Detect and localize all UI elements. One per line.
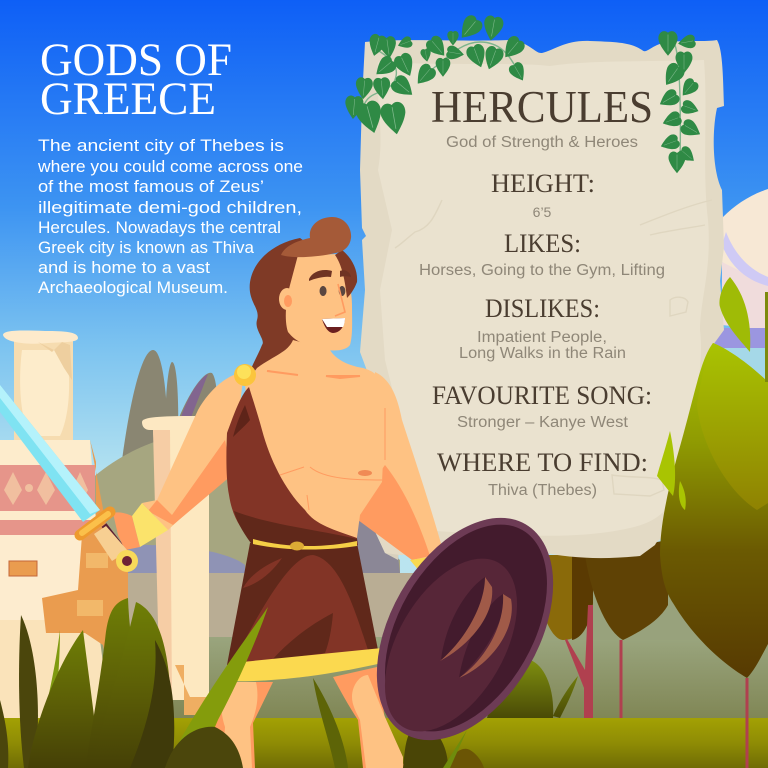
foreground grass centre xyxy=(313,678,484,768)
ruined temple, left xyxy=(0,440,128,718)
face xyxy=(286,254,352,350)
inner ear xyxy=(284,295,292,307)
scroll heading: Hercules: HERCULES xyxy=(431,82,653,132)
intro paragraph: of the most famous of Zeus’ xyxy=(38,178,264,196)
front hair right xyxy=(335,250,357,298)
main title: GREECE xyxy=(40,73,216,125)
pommel xyxy=(116,550,138,572)
intro paragraph: where you could come across one xyxy=(37,158,303,176)
right leg light xyxy=(352,675,403,768)
right arm inner shading xyxy=(358,465,430,560)
left leg xyxy=(215,682,273,768)
collar marks xyxy=(267,371,360,378)
chest lines xyxy=(280,408,385,510)
ground xyxy=(0,718,768,768)
sword grip xyxy=(104,525,128,556)
right arm outer xyxy=(372,372,445,570)
nose xyxy=(335,284,345,316)
foreground grass left xyxy=(0,598,268,768)
shield face centre xyxy=(358,536,544,754)
hand xyxy=(113,512,140,550)
stat: favourite song: FAVOURITE SONG: xyxy=(432,381,652,410)
foreground grass under shield xyxy=(403,728,448,768)
intro paragraph: Archaeological Museum. xyxy=(38,279,228,297)
right background grass xyxy=(487,659,578,718)
mouth xyxy=(322,318,345,333)
intro paragraph: and is home to a vast xyxy=(38,259,210,277)
distant cloud dome xyxy=(708,189,768,388)
eyes xyxy=(320,286,345,296)
stat: where to find: Thiva (Thebes) xyxy=(488,482,597,499)
left arm xyxy=(142,372,244,530)
back hair xyxy=(250,238,330,372)
stat: dislikes: DISLIKES: xyxy=(485,294,600,323)
crossguard highlight xyxy=(82,514,108,533)
background hills and bushes xyxy=(90,350,768,725)
pommel centre xyxy=(122,556,132,566)
stat: favourite song: Stronger – Kanye West xyxy=(457,414,629,431)
fingers xyxy=(94,526,128,561)
left arm inner shading xyxy=(148,440,232,525)
sword blade xyxy=(0,385,100,522)
wrist band xyxy=(410,557,430,572)
parchment weathering xyxy=(395,200,712,496)
main title: GODS OF xyxy=(40,34,232,86)
eyebrows xyxy=(309,270,351,281)
intro paragraph xyxy=(37,137,303,297)
hair swoosh and bun xyxy=(281,217,351,257)
stat: dislikes xyxy=(459,294,626,362)
stat: likes xyxy=(419,229,665,279)
toga lower shadow xyxy=(234,511,357,546)
intro paragraph: The ancient city of Thebes is xyxy=(38,137,284,155)
blade highlight xyxy=(0,385,100,514)
stat: where to find: WHERE TO FIND: xyxy=(437,448,648,477)
stat: dislikes: Impatient People, xyxy=(477,329,607,346)
vines and leaves xyxy=(344,13,704,173)
skirt fold xyxy=(233,555,368,663)
back trees xyxy=(540,540,668,720)
left leg light xyxy=(221,682,257,768)
intro paragraph: Hercules. Nowadays the central xyxy=(38,219,281,237)
stat: likes: Horses, Going to the Gym, Lifting xyxy=(419,262,665,279)
bracer xyxy=(132,503,168,547)
stat: likes: LIKES: xyxy=(504,229,581,258)
parchment scroll panel xyxy=(360,40,724,558)
ruined column, centre xyxy=(142,416,220,715)
skirt highlight xyxy=(243,558,282,588)
ear xyxy=(279,288,295,310)
intro paragraph: illegitimate demi-god children, xyxy=(38,199,302,217)
belt xyxy=(253,539,357,550)
right leg xyxy=(333,667,405,768)
clasp highlight xyxy=(237,365,251,379)
stat: dislikes: Long Walks in the Rain xyxy=(459,345,626,362)
belt buckle xyxy=(290,542,304,550)
ruined column, left xyxy=(3,330,78,445)
shield face dark xyxy=(351,497,581,759)
stat: where to find xyxy=(437,448,648,499)
intro paragraph: Greek city is known as Thiva xyxy=(38,239,255,257)
subtitle: God of Strength & Heroes xyxy=(446,134,638,151)
hem xyxy=(222,648,382,681)
shoulder clasp xyxy=(234,364,256,386)
parchment lighter centre xyxy=(377,60,709,536)
skirt inner shadow xyxy=(272,613,333,660)
stat: favourite song xyxy=(432,381,652,431)
claw mark shadows xyxy=(441,577,505,678)
large tree, right xyxy=(657,277,768,768)
torso xyxy=(245,340,386,545)
toga fold xyxy=(233,405,250,437)
stat: height xyxy=(491,169,595,220)
shield rim xyxy=(340,487,590,768)
stat: height: 6’5 xyxy=(533,204,552,220)
skirt xyxy=(227,543,378,665)
shield claw marks xyxy=(440,577,512,678)
main title xyxy=(40,34,232,125)
toga upper xyxy=(226,387,358,545)
stat: height: HEIGHT: xyxy=(491,169,595,198)
crossguard xyxy=(80,512,110,535)
hercules figure xyxy=(0,217,590,768)
nipple xyxy=(358,470,372,476)
teeth xyxy=(322,318,345,327)
